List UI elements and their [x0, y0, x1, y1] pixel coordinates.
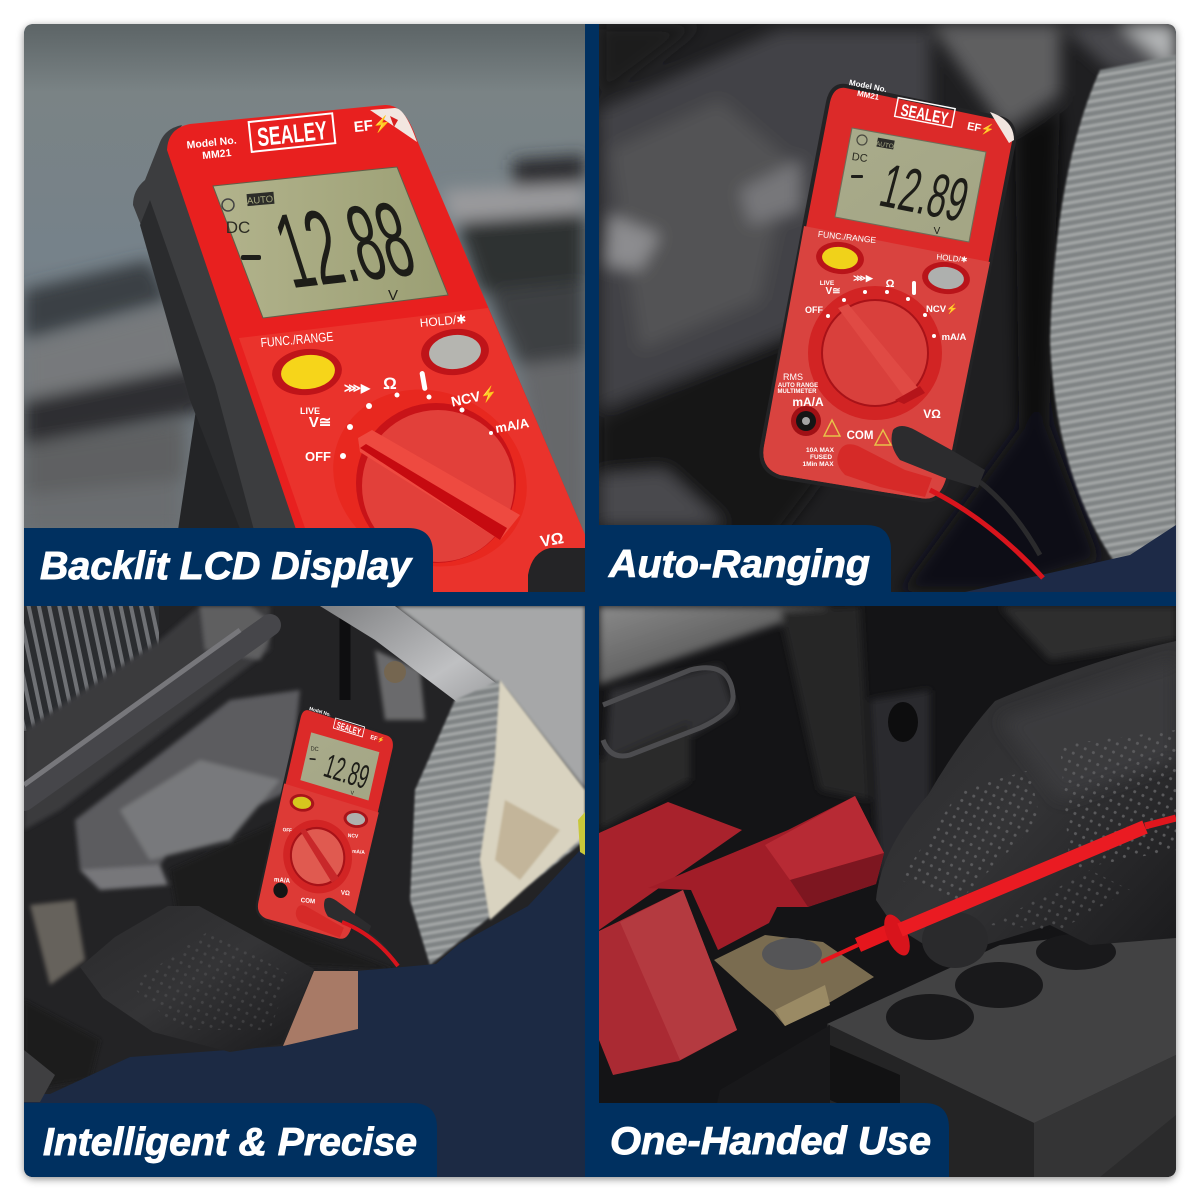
meter: dial legends: LIVE	[820, 280, 835, 287]
meter: dial legends: OFF	[305, 449, 331, 464]
gloved hand	[80, 906, 314, 1052]
meter: top labels: Model No.	[186, 134, 237, 152]
battery vent caps	[886, 934, 1116, 1040]
small meter: V	[350, 790, 355, 797]
headlight	[410, 680, 585, 965]
red test probe	[821, 818, 1176, 962]
small meter: mA/A	[274, 876, 291, 885]
label: One-Handed Use: One-Handed Use	[610, 1120, 931, 1163]
meter: dial legends: ⋙▶	[853, 273, 874, 283]
meter: LCD display: V	[934, 226, 941, 237]
meter: top labels: EF⚡	[966, 119, 996, 137]
meter: lower labels and jacks: mA/A	[792, 395, 824, 409]
meter: top labels: SEALEY	[899, 101, 950, 128]
small meter: VΩ	[341, 889, 350, 897]
meter: buttons: FUNC./RANGE	[260, 329, 334, 350]
label: Intelligent & Precise: Intelligent & Precise	[43, 1121, 417, 1164]
meter: corner triangle	[990, 112, 1014, 143]
meter: dial legends: ⋙▶	[344, 381, 371, 395]
red terminal cover	[599, 796, 884, 1075]
label: One-Handed Use	[599, 1103, 949, 1177]
test lead plug	[528, 548, 590, 592]
meter: dial legends: mA/A	[494, 415, 531, 436]
meter: LCD display: AUTO	[875, 140, 894, 150]
small meter: Model No.	[309, 706, 331, 718]
meter: stand and rubber body	[133, 125, 296, 528]
mechanic sleeve	[24, 845, 585, 1177]
small meter: DC	[310, 746, 319, 753]
bare wrist	[283, 971, 358, 1046]
meter: buttons	[260, 312, 491, 399]
small meter: SEALEY	[336, 720, 362, 737]
meter: rotary dial	[334, 390, 527, 566]
small meter: EF⚡	[370, 733, 385, 745]
panel: One-Handed Use	[599, 606, 1176, 1177]
test leads	[837, 426, 1043, 578]
label: Backlit LCD Display: Backlit LCD Display	[40, 545, 413, 588]
meter: dial legends	[805, 273, 967, 343]
engine bay background	[599, 24, 1176, 592]
label: Backlit LCD Display	[24, 528, 433, 592]
meter: top labels	[186, 112, 388, 159]
small meter: COM	[301, 897, 315, 906]
meter: top labels: MM21	[202, 147, 232, 162]
meter: LCD display	[213, 167, 448, 318]
meter: LCD display: 12.89	[873, 151, 975, 235]
meter: red face	[167, 105, 600, 600]
small meter: mA/A	[352, 849, 365, 856]
meter: top labels: EF⚡	[353, 114, 392, 136]
lower glove	[24, 1050, 55, 1102]
panel: Backlit LCD Display	[24, 24, 600, 600]
meter: LCD display	[835, 128, 986, 242]
meter: rotary dial	[808, 286, 942, 420]
meter: corner triangle	[370, 108, 417, 142]
engine bay background	[599, 606, 1176, 1177]
meter: dial legends: mA/A	[942, 332, 967, 343]
meter: top labels	[849, 80, 992, 134]
engine bay background	[24, 606, 585, 1177]
small meter	[256, 702, 396, 944]
meter: lower labels and jacks	[778, 372, 941, 468]
meter: dial legends: NCV⚡	[926, 303, 958, 315]
meter: lower labels and jacks: RMS	[783, 372, 803, 382]
gloved hand	[876, 641, 1176, 968]
battery	[827, 938, 1176, 1177]
meter: lower labels and jacks: 1Min MAX	[802, 461, 834, 468]
label: Auto-Ranging: Auto-Ranging	[608, 543, 870, 586]
meter: dial legends: Ω	[886, 278, 895, 290]
meter: dial legends: VΩ	[539, 530, 565, 551]
meter: lower labels and jacks: MULTIMETER	[778, 389, 817, 395]
meter: top labels: Model No.	[848, 78, 888, 94]
meter: dial legends: LIVE	[300, 406, 320, 416]
label: Intelligent & Precise	[24, 1103, 437, 1177]
small meter: OFF	[283, 827, 292, 834]
meter: dial legends: NCV⚡	[450, 384, 499, 411]
meter: dial legends: Ω	[383, 374, 397, 393]
meter: lower labels and jacks: VΩ	[923, 407, 941, 421]
meter: dial legends: V≅	[309, 414, 331, 431]
battery terminal	[714, 935, 874, 1026]
meter: buttons: HOLD/✱	[419, 312, 467, 330]
meter: dial legends: OFF	[805, 305, 823, 315]
meter: LCD display: DC	[226, 218, 250, 237]
yellow accent	[578, 812, 585, 855]
meter: LCD display: DC	[851, 151, 868, 165]
meter: buttons	[814, 229, 972, 296]
meter: lower labels and jacks: AUTO RANGE	[778, 383, 818, 389]
meter: case and face	[761, 86, 1014, 501]
blurred garage background	[24, 24, 585, 534]
meter: top labels: SEALEY	[256, 115, 328, 152]
mechanic sleeve	[965, 525, 1176, 592]
meter: dial legends: V≅	[825, 286, 841, 297]
small meter: 12.89	[320, 746, 374, 796]
meter: LCD display: AUTO	[247, 194, 274, 207]
panel: Intelligent & Precise	[24, 606, 585, 1177]
label: Auto-Ranging	[599, 525, 891, 592]
meter: LCD display: V	[388, 287, 398, 304]
small meter: NCV	[348, 833, 359, 840]
meter: lower labels and jacks: COM	[847, 430, 873, 442]
meter: lower labels and jacks: FUSED	[810, 454, 832, 461]
meter: buttons: HOLD/✱	[936, 252, 968, 265]
meter: LCD display: 12.88	[262, 180, 427, 310]
meter: lower labels and jacks: 10A MAX	[806, 447, 835, 454]
meter: buttons: FUNC./RANGE	[817, 229, 877, 245]
headlight lens	[1050, 55, 1176, 570]
meter: dial legends	[300, 371, 565, 551]
meter: top labels: MM21	[856, 89, 880, 102]
panel: Auto-Ranging	[599, 24, 1176, 592]
test leads	[342, 922, 398, 966]
